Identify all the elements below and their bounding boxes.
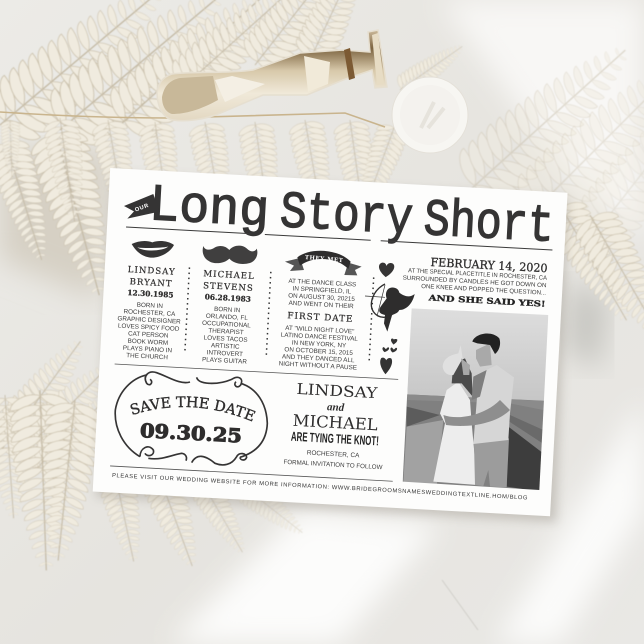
name: LINDSAY bbox=[127, 265, 176, 278]
first date paragraph: IN NEW YORK, NY bbox=[292, 339, 347, 349]
man's head bbox=[476, 343, 492, 367]
icon: They Met ribbon bbox=[285, 251, 362, 275]
icon: tall heart bbox=[380, 358, 392, 375]
first date paragraph: LATINO DANCE FESTIVAL bbox=[281, 332, 359, 343]
man's chest bbox=[472, 370, 487, 400]
bio: THERAPIST bbox=[208, 327, 244, 336]
proposal paragraph: ONE KNEE AND POPPED THE QUESTION... bbox=[421, 283, 547, 297]
man's hair bbox=[472, 334, 500, 354]
first date paragraph: NIGHT WITHOUT A PAUSE bbox=[278, 360, 357, 372]
title: Long Story Short: Short bbox=[422, 191, 555, 257]
wedding date: 09.30.25 bbox=[139, 420, 242, 448]
column: Lindsay Bryant: BRYANT bbox=[129, 277, 173, 290]
bio: PLAYS PIANO IN bbox=[123, 345, 173, 354]
formal invitation note: FORMAL INVITATION TO FOLLOW bbox=[283, 459, 383, 471]
bio: ROCHESTER, CA bbox=[123, 308, 176, 318]
save the date text bbox=[130, 396, 256, 448]
embracing arms bbox=[443, 400, 510, 426]
first date paragraph: ON OCTOBER 15, 2015 bbox=[284, 346, 353, 357]
column: Michael Stevens bbox=[199, 269, 255, 366]
birth date: 06.28.1983 bbox=[204, 292, 251, 304]
proposal paragraph: AT THE SPECIAL PLACETITLE IN ROCHESTER, CA bbox=[408, 267, 548, 282]
gold fern stem bbox=[0, 112, 385, 127]
header rule bbox=[126, 227, 552, 250]
footer website line: PLEASE VISIT OUR WEDDING WEBSITE FOR MORE INFORMATION: WWW.BRIDEGROOMSNAMESWEDDINGTEXTLINE.HOM/BLOG bbox=[112, 473, 528, 502]
icon: They Met ribbon: THEY MET bbox=[305, 255, 344, 264]
bio: INTROVERT bbox=[207, 349, 243, 358]
lavender field bbox=[400, 394, 550, 493]
first date paragraph: AT "WILD NIGHT LOVE" bbox=[285, 325, 354, 335]
proposal paragraph bbox=[402, 267, 548, 297]
column dividers bbox=[185, 267, 374, 363]
bio: CAT PERSON bbox=[128, 330, 169, 340]
icon: OUR banner: OUR bbox=[134, 203, 150, 214]
column: Lindsay Bryant bbox=[115, 265, 184, 362]
icon: lips bbox=[132, 241, 174, 258]
date heading: February 14, 2020: FEBRUARY 14, 2020 bbox=[430, 255, 548, 275]
bio: BORN IN bbox=[214, 306, 241, 314]
proposal paragraph: SURROUNDED BY CANDLES HE GOT DOWN ON bbox=[403, 274, 547, 289]
invitation card bbox=[92, 168, 568, 516]
icon: brass wax stamp bbox=[157, 30, 387, 121]
save the date ornamental frame bbox=[115, 372, 267, 465]
icon: double heart bbox=[382, 347, 397, 353]
bio: OCCUPATIONAL bbox=[202, 320, 251, 329]
bio: THE CHURCH bbox=[126, 352, 168, 361]
arched heading: SAVE THE DATE bbox=[130, 396, 256, 422]
icon: mustache bbox=[203, 246, 257, 264]
birth date: 12.30.1985 bbox=[127, 288, 174, 300]
bio bbox=[200, 305, 252, 366]
column: They Met bbox=[278, 278, 362, 372]
title: Long Story Short: Long bbox=[148, 176, 271, 242]
story paragraph: IN SPRINGFIELD, IL bbox=[292, 285, 352, 296]
woman's hat bbox=[443, 345, 463, 375]
woman's hair bbox=[452, 358, 473, 397]
bio: GRAPHIC DESIGNER bbox=[117, 315, 181, 326]
title: Long Story Short: Story bbox=[278, 183, 414, 249]
name: Michael: MICHAEL bbox=[292, 411, 379, 434]
woman's face bbox=[461, 358, 470, 375]
bio: BORN IN bbox=[137, 302, 164, 310]
bio: LOVES TACOS bbox=[204, 335, 248, 344]
couple names block bbox=[283, 379, 387, 471]
icon: small heart bbox=[391, 338, 397, 345]
column: Michael Stevens: STEVENS bbox=[203, 281, 254, 294]
icon: heart bbox=[378, 262, 394, 277]
bio: ORLANDO, FL bbox=[206, 313, 248, 322]
tagline: ARE TYING THE KNOT! bbox=[291, 429, 379, 448]
bio bbox=[115, 301, 182, 362]
bio: PLAYS GUITAR bbox=[202, 356, 248, 366]
upper-left printed icons bbox=[124, 194, 362, 275]
first date paragraph: AND THEY DANCED ALL bbox=[282, 353, 355, 364]
woman's dress bbox=[433, 382, 477, 485]
man's trousers bbox=[474, 438, 509, 487]
bio: ARTISTIC bbox=[211, 342, 240, 351]
sky bbox=[407, 307, 550, 402]
story paragraph: AND WENT ON THEIR bbox=[288, 300, 354, 310]
man's shirt bbox=[473, 365, 514, 444]
bio: LOVES SPICY FOOD bbox=[118, 323, 180, 333]
location: ROCHESTER, CA bbox=[307, 450, 360, 459]
story paragraph: AT THE DANCE CLASS bbox=[288, 278, 356, 288]
mid rule bbox=[115, 364, 398, 379]
first date paragraph bbox=[278, 324, 359, 372]
icon: OUR banner bbox=[124, 194, 159, 219]
name: Lindsay: LINDSAY bbox=[296, 380, 379, 402]
card shadow bbox=[96, 174, 568, 522]
icon: white wax seal bbox=[392, 77, 468, 153]
bottom rule bbox=[110, 466, 393, 481]
story paragraph bbox=[287, 278, 356, 310]
name: MICHAEL bbox=[203, 269, 255, 282]
photo: couple in lavender field bbox=[400, 307, 550, 493]
heading: First Date: FIRST DATE bbox=[287, 311, 354, 325]
callout: And she said yes: AND SHE SAID YES! bbox=[427, 292, 546, 309]
bio: BOOK WORM bbox=[127, 338, 168, 347]
icon: cupid with bow bbox=[365, 284, 415, 332]
script: and: and bbox=[327, 401, 345, 414]
title: Long Story Short bbox=[148, 176, 555, 257]
story paragraph: ON AUGUST 30, 20215 bbox=[288, 292, 356, 303]
